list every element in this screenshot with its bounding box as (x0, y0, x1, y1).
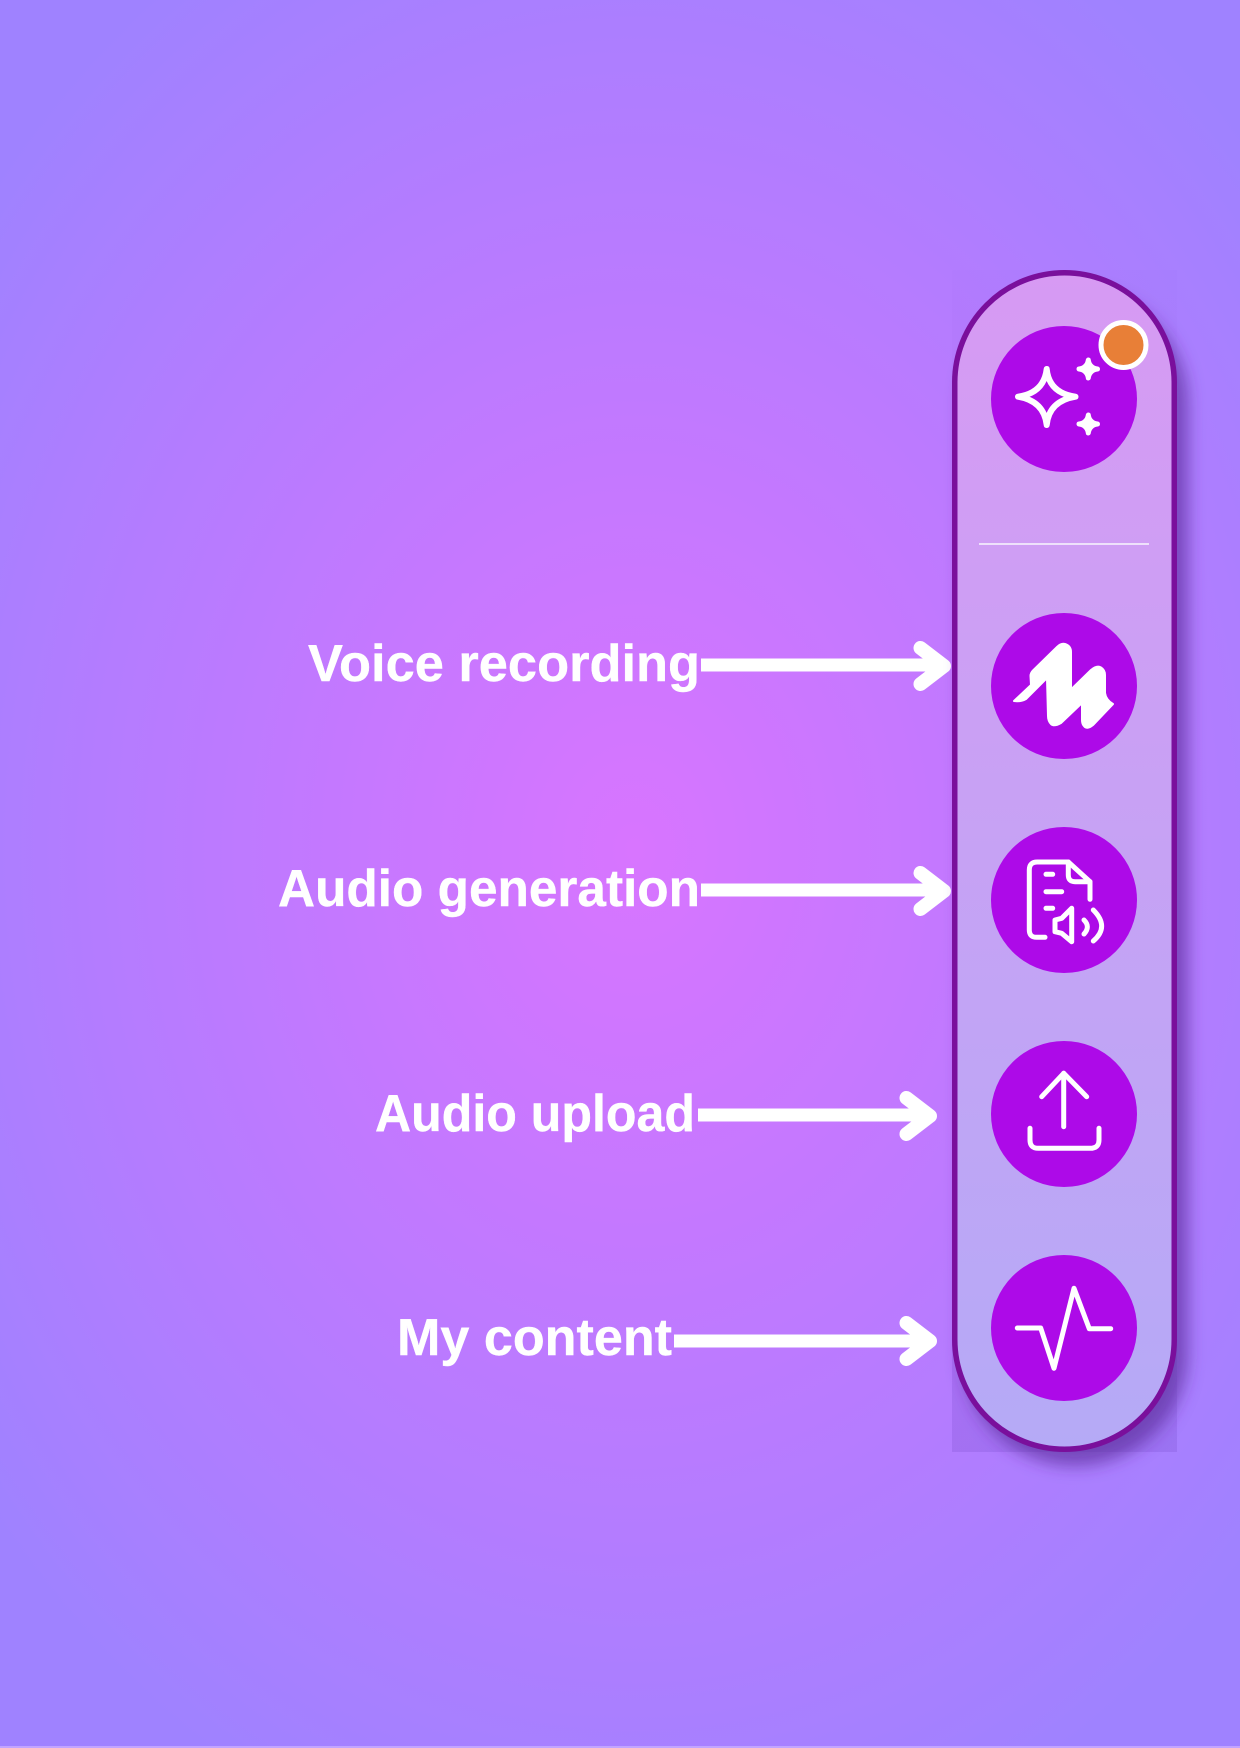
icon button: audio generation document (991, 827, 1137, 973)
icon button: sparkles (991, 326, 1137, 472)
panel: sidebar pill (952, 270, 1188, 1466)
arrow: My content (674, 1323, 930, 1359)
icon button: voice logo (991, 613, 1137, 759)
label: Voice recording: Voice recording (308, 635, 700, 693)
arrow: Audio upload (698, 1098, 930, 1134)
label: My content: My content (397, 1309, 672, 1367)
arrow: Voice recording (701, 648, 944, 684)
icon button: upload (991, 1041, 1137, 1187)
label: Audio generation: Audio generation (278, 860, 700, 918)
bottom edge strip (0, 1746, 1240, 1748)
label: Audio upload: Audio upload (375, 1085, 695, 1143)
arrow: Audio generation (701, 873, 944, 909)
icon button: waveform (991, 1255, 1137, 1401)
notification dot (1101, 322, 1146, 368)
divider (979, 543, 1149, 545)
